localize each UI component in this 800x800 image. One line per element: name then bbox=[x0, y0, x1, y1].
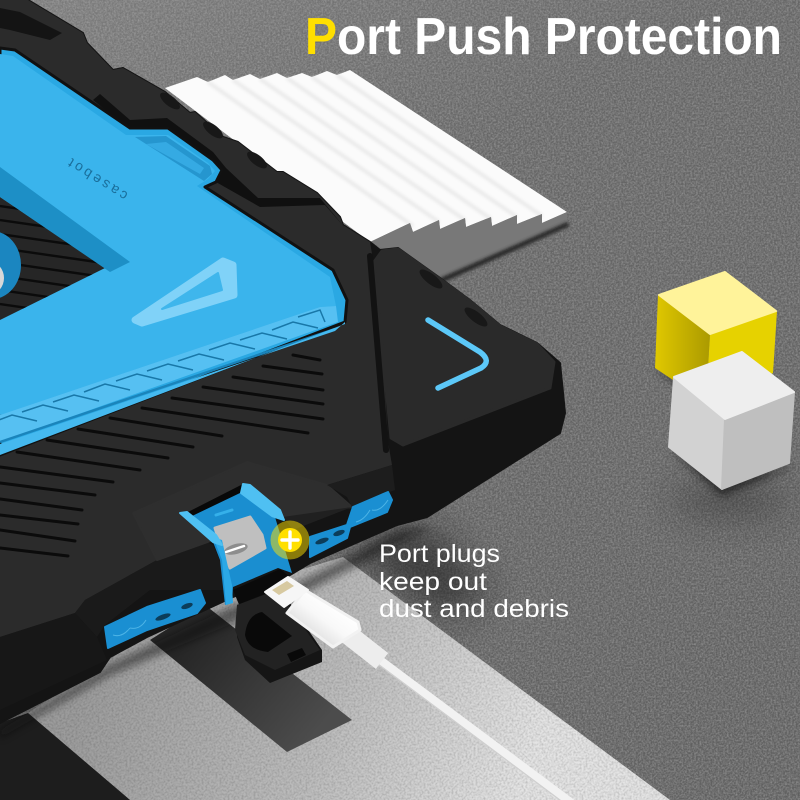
ribbed back pattern bbox=[0, 355, 323, 556]
side vent left bbox=[105, 590, 205, 648]
triangle emboss bbox=[135, 261, 234, 323]
small tab in plug bbox=[216, 510, 232, 515]
callout text bbox=[379, 540, 569, 623]
yellow cube bbox=[654, 272, 777, 400]
port bump face bbox=[133, 462, 352, 560]
callout marker bbox=[270, 520, 310, 560]
black stripe on floor bbox=[0, 713, 130, 800]
lightning cable bbox=[265, 577, 575, 800]
top recess bbox=[135, 136, 212, 181]
blue frame panel bbox=[0, 48, 347, 455]
plug interior bbox=[190, 493, 292, 605]
corner button dimples bbox=[157, 90, 490, 330]
connector housing bbox=[287, 590, 360, 647]
window cutout bbox=[0, 197, 105, 320]
charging port with port plug bbox=[180, 484, 296, 607]
panel main surface bbox=[0, 54, 336, 415]
lower lip strip bbox=[0, 306, 338, 442]
top-edge dark bumper shapes bbox=[0, 8, 62, 40]
plug lip left bbox=[180, 512, 222, 545]
window ribs bbox=[0, 205, 97, 308]
port bump bevel right bbox=[327, 465, 395, 507]
metal port surround bbox=[215, 517, 265, 568]
plug front column bbox=[213, 537, 233, 605]
case top face bbox=[0, 0, 392, 637]
lower left body side bbox=[0, 613, 107, 710]
panel groove bbox=[0, 48, 347, 455]
light stripe on floor bbox=[28, 557, 670, 800]
strain relief bbox=[345, 632, 382, 661]
callout text: dust and debris bbox=[379, 595, 569, 623]
ring stand bbox=[0, 231, 21, 299]
black opening top and underside bbox=[188, 484, 252, 522]
metal tip bbox=[265, 577, 308, 607]
callout text: keep out bbox=[379, 568, 487, 596]
device shadow bbox=[0, 528, 430, 738]
white cube bbox=[668, 352, 795, 496]
side vent right bbox=[310, 492, 392, 557]
USB-C slot bbox=[223, 541, 249, 557]
stepped white ramp bbox=[165, 70, 570, 283]
plug lip right bbox=[241, 484, 284, 520]
corner piece bbox=[374, 249, 554, 445]
casebot logo: casebot bbox=[62, 154, 130, 204]
rubber port plug cap bbox=[235, 588, 322, 683]
dark stripe on floor bbox=[150, 605, 352, 752]
rugged case body bbox=[0, 0, 565, 723]
bevel under face bbox=[75, 540, 233, 637]
corner accent line bbox=[428, 320, 486, 388]
window bevel bbox=[0, 167, 130, 272]
cable wire bbox=[378, 659, 575, 800]
case silhouette bbox=[0, 0, 565, 723]
lip zigzag pattern bbox=[0, 310, 325, 423]
callout text: Port plugs bbox=[379, 540, 500, 568]
